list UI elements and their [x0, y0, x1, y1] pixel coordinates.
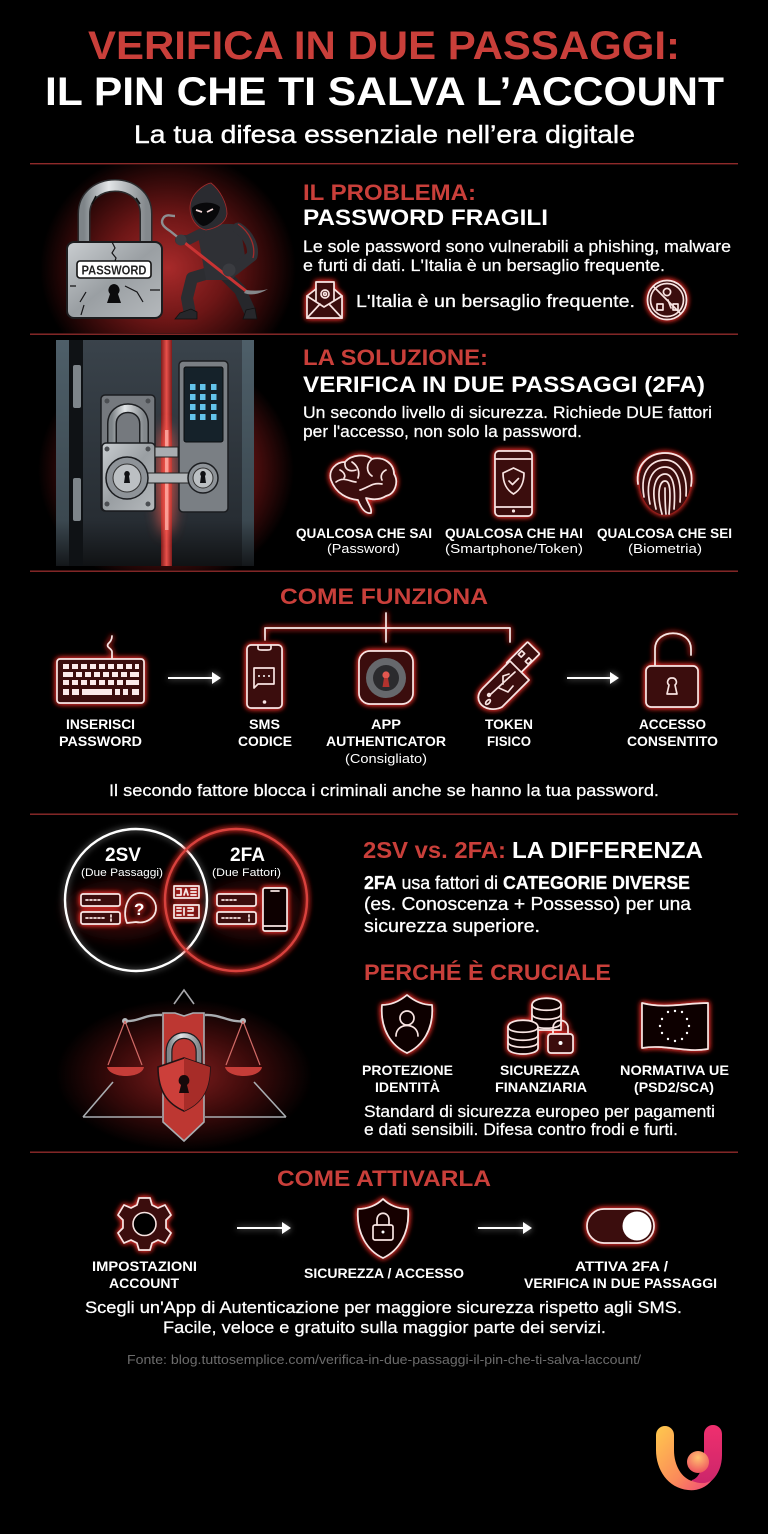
arrow: [168, 672, 221, 684]
panel: problem text: Le sole password sono vulnerabili a phishing, malware: [303, 237, 731, 256]
keypad: [179, 361, 228, 512]
panel: problem illustration: [45, 165, 291, 333]
text: european standard: e dati sensibili. Difesa contro frodi e furti.: [364, 1121, 678, 1139]
labels: reasons: (PSD2/SCA): [634, 1079, 714, 1095]
icon: open padlock: [646, 633, 698, 707]
labels: activation steps: ATTIVA 2FA /: [575, 1259, 668, 1274]
heading: COME FUNZIONA: [280, 584, 488, 609]
subtitle: La tua difesa essenziale nell’era digitale: [134, 121, 635, 149]
icon: hooded thief: [162, 183, 268, 319]
icon: settings gear: [118, 1198, 171, 1250]
title: VERIFICA IN DUE PASSAGGI:: [88, 24, 680, 68]
heading: COME ATTIVARLA: [277, 1166, 491, 1191]
panel: problem text: PASSWORD FRAGILI: [303, 205, 548, 230]
labels: how it works: ACCESSO: [639, 717, 706, 732]
panel: difference text: 2FA usa fattori di CATEGORIE DIVERSE: [364, 873, 690, 893]
text: european standard: Standard di sicurezza europeo per pagamenti: [364, 1103, 715, 1121]
labels: reasons: PROTEZIONE: [362, 1062, 453, 1078]
icon: scales of justice with shield: [56, 990, 312, 1151]
text: recommendation: Scegli un'App di Autenticazione per maggiore sicurezza rispetto agli SMS.: [85, 1298, 682, 1317]
icon: broken padlock: [67, 186, 162, 318]
text: recommendation: Facile, veloce e gratuito sulla maggior parte dei servizi.: [163, 1318, 606, 1337]
icon: brain: [330, 456, 396, 513]
labels: three factors: (Biometria): [628, 541, 702, 556]
labels: how it works: TOKEN: [485, 717, 533, 732]
labels: three factors: QUALCOSA CHE SEI: [597, 526, 732, 541]
text: european standard: [364, 1103, 715, 1139]
panel: solution text: Un secondo livello di sicurezza. Richiede DUE fattori: [303, 403, 712, 422]
title: IL PIN CHE TI SALVA L’ACCOUNT: [45, 70, 724, 114]
icon: toggle on: [587, 1209, 654, 1243]
title: [45, 24, 724, 114]
panel: problem text: [303, 180, 731, 320]
labels: activation steps: VERIFICA IN DUE PASSAGGI: [524, 1276, 717, 1291]
panel: problem text: IL PROBLEMA:: [303, 180, 476, 205]
panel: come funziona: [57, 584, 718, 800]
panel: difference text: sicurezza superiore.: [364, 916, 540, 936]
icon: coins with padlock: [508, 998, 573, 1054]
labels: activation steps: [92, 1259, 717, 1291]
labels: reasons: FINANZIARIA: [495, 1079, 587, 1095]
source: Fonte: blog.tuttosemplice.com/verifica-in-due-passaggi-il-pin-che-ti-salva-laccount/: [127, 1353, 642, 1367]
labels: how it works: AUTHENTICATOR: [326, 734, 446, 749]
icon: broken padlock: PASSWORD: [82, 264, 146, 278]
icon: no data theft: [648, 280, 686, 320]
panel: solution text: [296, 345, 732, 556]
icon: authenticator app: [359, 651, 413, 704]
icon: fingerprint: [638, 453, 692, 515]
labels: reasons: NORMATIVA UE: [620, 1062, 729, 1078]
labels: how it works: PASSWORD: [59, 734, 142, 749]
labels: activation steps: IMPOSTAZIONI: [92, 1259, 197, 1274]
labels: activation steps: SICUREZZA / ACCESSO: [304, 1266, 464, 1281]
icon: EU flag: [642, 1003, 708, 1050]
labels: reasons: SICUREZZA: [500, 1062, 580, 1078]
left fields and question bubble: [81, 893, 156, 924]
panel: difference text: (es. Conoscenza + Possesso) per una: [364, 894, 692, 914]
labels: how it works: [59, 717, 718, 766]
right fields and phone: [217, 888, 287, 931]
logo: [656, 1425, 722, 1490]
labels: how it works: SMS: [249, 717, 280, 732]
labels: how it works: INSERISCI: [66, 717, 135, 732]
arrow: [567, 672, 619, 684]
icon: security shield: [358, 1199, 408, 1258]
chart: venn 2SV vs 2FA: (Due Passaggi): [81, 867, 163, 879]
labels: reasons: IDENTITÀ: [375, 1079, 440, 1095]
panel: solution text: LA SOLUZIONE:: [303, 345, 488, 370]
icon: smartphone with shield: [495, 451, 532, 516]
arrow: [478, 1222, 532, 1234]
labels: three factors: (Password): [327, 541, 400, 556]
bracket connector: [265, 613, 510, 642]
labels: how it works: APP: [371, 717, 401, 732]
labels: how it works: (Consigliato): [345, 751, 427, 766]
labels: how it works: CONSENTITO: [627, 734, 718, 749]
labels: how it works: CODICE: [238, 734, 292, 749]
panel: difference text: [363, 837, 703, 936]
text: recommendation: [85, 1298, 682, 1337]
labels: three factors: (Smartphone/Token): [445, 541, 583, 556]
labels: three factors: QUALCOSA CHE SAI: [296, 526, 432, 541]
panel: difference text: 2SV vs. 2FA:: [363, 837, 506, 863]
arrow: [237, 1222, 291, 1234]
icon: sms phone: [247, 645, 282, 708]
panel: solution text: VERIFICA IN DUE PASSAGGI (2FA): [303, 372, 705, 397]
chart: venn 2SV vs 2FA: 2FA: [230, 845, 265, 866]
chart: venn 2SV vs 2FA: [65, 829, 307, 971]
labels: activation steps: ACCOUNT: [109, 1276, 180, 1291]
labels: reasons: [362, 1062, 729, 1095]
panel: come attivarla: [85, 1166, 717, 1337]
panel: perche e cruciale: [362, 960, 729, 1139]
left fields and question bubble: ?: [134, 900, 144, 919]
panel: problem text: e furti di dati. L'Italia è un bersaglio frequente.: [303, 256, 665, 275]
labels: three factors: [296, 526, 732, 556]
labels: how it works: FISICO: [487, 734, 531, 749]
panel: solution illustration: [42, 340, 290, 570]
panel: difference text: LA DIFFERENZA: [512, 837, 703, 863]
padlock plate: [101, 395, 218, 511]
icon: usb token: [478, 642, 540, 709]
panel: problem text: L'Italia è un bersaglio frequente.: [356, 291, 635, 311]
overlap fields: [174, 886, 199, 918]
chart: venn 2SV vs 2FA: (Due Fattori): [212, 867, 281, 879]
icon: keyboard: [57, 636, 144, 703]
vault door: [56, 340, 254, 566]
icon: phishing envelope: [307, 282, 342, 318]
chart: venn 2SV vs 2FA: 2SV: [105, 845, 141, 866]
labels: three factors: QUALCOSA CHE HAI: [445, 526, 583, 541]
icon: identity shield: [382, 995, 432, 1053]
panel: solution text: per l'accesso, non solo la password.: [303, 422, 582, 441]
text: second factor note: Il secondo fattore blocca i criminali anche se hanno la tua password.: [109, 781, 659, 800]
heading: PERCHÉ È CRUCIALE: [364, 960, 611, 985]
